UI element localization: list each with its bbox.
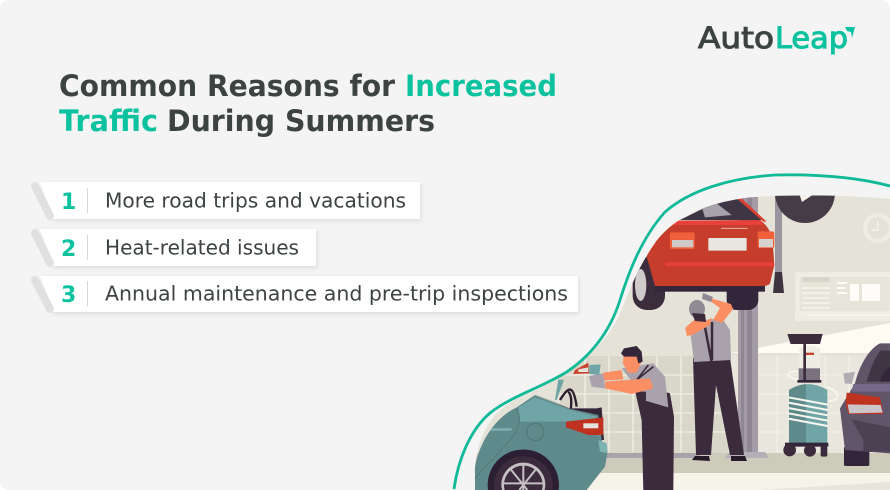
list item 3: Annual maintenance and pre-trip inspections <box>105 282 568 306</box>
list item 1: 1 <box>61 190 76 215</box>
wall and floor <box>470 190 890 490</box>
title: Common Reasons for <box>59 69 396 103</box>
list item 3: 3 <box>61 283 76 308</box>
list item 1 <box>35 182 420 219</box>
mechanic at the trunk <box>573 346 674 490</box>
red car on lift <box>633 198 774 310</box>
title: Traffic <box>59 104 158 138</box>
mechanic under the lift <box>685 293 747 461</box>
title: Increased <box>405 69 557 103</box>
garage illustration <box>474 196 890 490</box>
car wheels <box>633 257 765 310</box>
list item 2: 2 <box>61 237 76 262</box>
teal car <box>475 379 608 490</box>
title <box>59 69 557 138</box>
list item 2 <box>35 229 316 266</box>
air hose pole and reel <box>773 196 835 293</box>
logo: AutoLeap: Auto <box>698 21 774 55</box>
overalls <box>693 358 744 455</box>
logo: AutoLeap: Leap <box>775 21 848 55</box>
lift pillar <box>725 197 769 458</box>
teal curve outline <box>454 175 890 489</box>
shirt and arms <box>690 318 731 362</box>
teal car and mechanic group <box>475 346 674 490</box>
list item 3 <box>35 276 578 312</box>
list item 1: More road trips and vacations <box>105 188 406 212</box>
purple car <box>840 343 890 466</box>
wall poster <box>795 272 890 321</box>
wall clock <box>863 213 890 243</box>
list item 2: Heat-related issues <box>105 236 299 260</box>
logo: AutoLeap <box>698 21 855 55</box>
waste oil drain machine <box>783 334 838 457</box>
title: During Summers <box>167 104 435 138</box>
